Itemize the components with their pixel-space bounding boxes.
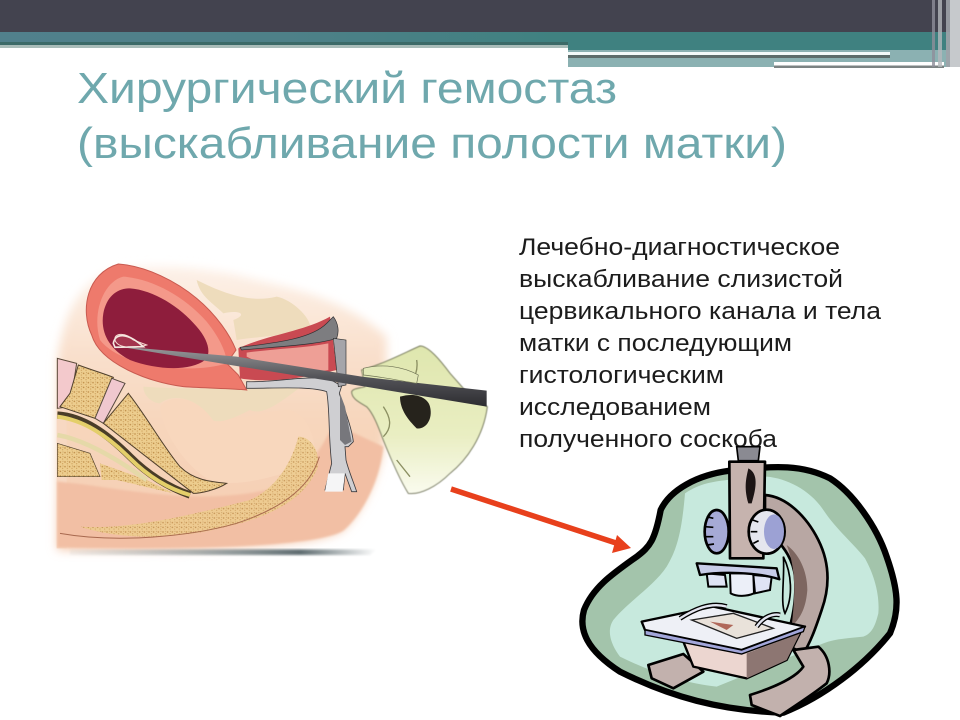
gloved hand <box>352 346 487 494</box>
hand shadow <box>400 395 431 429</box>
description text: выскабливание слизистой <box>519 266 843 293</box>
description text: исследованием <box>519 394 711 421</box>
uterus inner layer <box>97 277 227 368</box>
bladder and peritoneum <box>143 280 310 421</box>
base foot left <box>648 654 703 688</box>
tube <box>729 462 765 558</box>
eyepiece <box>737 447 760 461</box>
spinal canal <box>57 415 190 495</box>
header band <box>0 0 960 68</box>
abdominal cavity <box>160 399 317 483</box>
fatty layer <box>80 437 318 537</box>
description text: гистологическим <box>519 362 724 389</box>
illustration: curettage of uterine cavity <box>57 264 487 555</box>
uterine cavity <box>103 288 208 368</box>
backdrop blob <box>582 467 897 713</box>
fingers over curette <box>363 366 418 383</box>
stage <box>642 607 805 650</box>
arm <box>765 495 828 653</box>
base foot right <box>750 647 829 716</box>
arrow <box>451 489 631 553</box>
uterus wall <box>86 264 247 390</box>
title: Хирургический гемостаз <box>77 64 617 113</box>
curette <box>113 336 487 407</box>
microscope clipart <box>582 447 897 716</box>
pelvic bone <box>57 358 227 493</box>
title <box>77 64 787 168</box>
focus knob left <box>705 510 729 553</box>
objectives <box>697 563 779 596</box>
description text: цервикального канала и тела <box>519 298 881 325</box>
title: (выскабливание полости матки) <box>77 119 787 168</box>
backdrop highlight <box>610 477 879 687</box>
description text: полученного соскоба <box>519 426 777 453</box>
floor shadow <box>70 549 377 555</box>
body silhouette <box>57 267 387 550</box>
speculum <box>240 317 357 492</box>
stage pedestal <box>683 633 800 678</box>
lower body tone <box>57 423 383 548</box>
description text <box>519 234 881 453</box>
description text: матки с последующим <box>519 330 792 357</box>
description text: Лечебно-диагностическое <box>519 234 840 261</box>
focus knob right <box>749 510 785 554</box>
vaginal canal <box>238 317 337 380</box>
